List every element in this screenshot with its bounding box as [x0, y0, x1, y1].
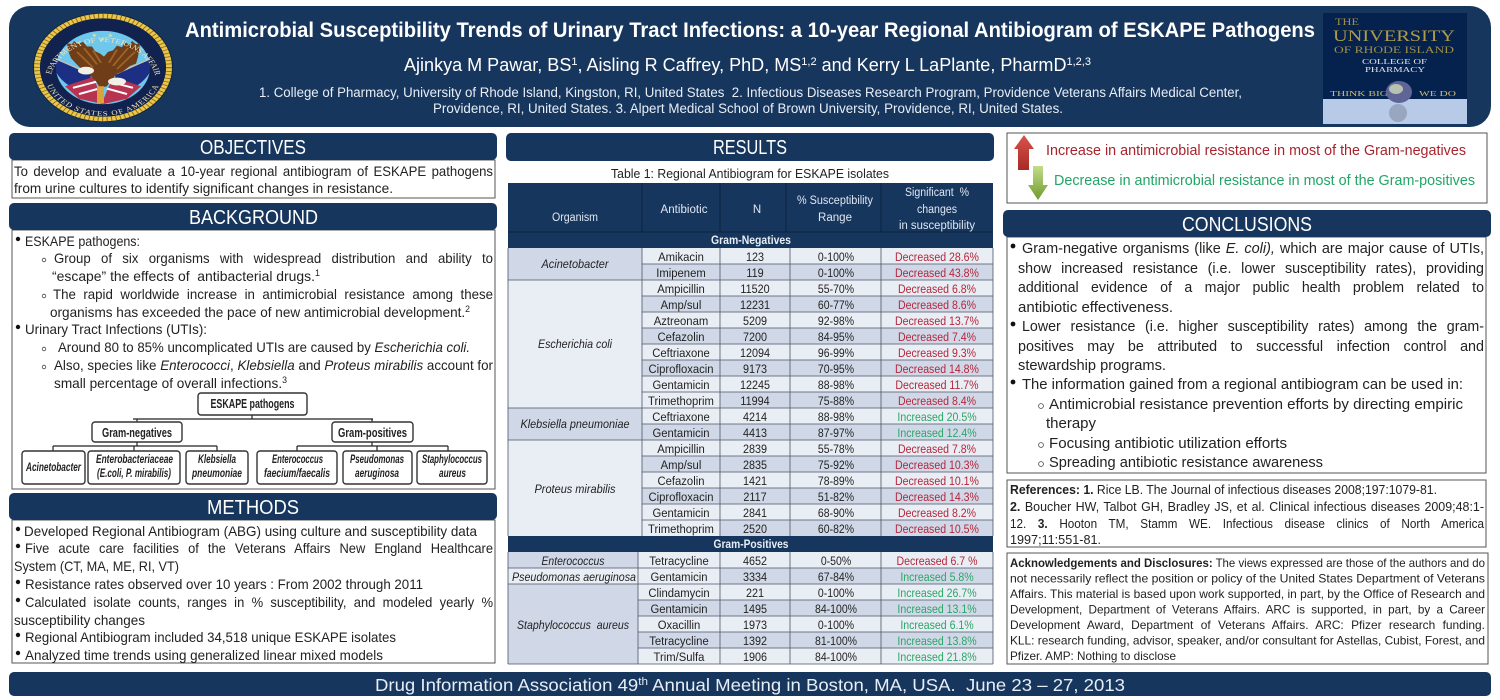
panel: acknowledgements and disclosures: Development Award, Department of Veterans Affairs. ARC: Pfizer research funding.: [1010, 618, 1485, 632]
antibiotic column: Amikacin: [658, 251, 704, 264]
methods text: System (CT, MA, ME, RI, VT): [14, 558, 179, 574]
logo: University of Rhode Island College of Pharmacy: UNIVERSITY: [1333, 28, 1455, 45]
conclusions text: show increased resistance (i.e. lower susceptibility rates), providing: [1018, 260, 1484, 277]
N column: 119: [746, 268, 764, 280]
ESKAPE pathogens tree diagram: Gram-positives: [338, 426, 407, 440]
organism names: Acinetobacter: [541, 257, 609, 271]
susceptibility range column: 0-100%: [818, 619, 854, 632]
significant changes column: Decreased 7.8%: [898, 443, 976, 456]
arrow: increase in resistance: [1014, 135, 1034, 170]
conclusions text: positives may be attributed to successful infection control and: [1018, 338, 1484, 355]
N column: 12094: [740, 348, 771, 360]
N column: 4214: [743, 412, 768, 424]
antibiotic column: Ciprofloxacin: [648, 491, 714, 504]
heading: objectives: OBJECTIVES: [200, 137, 306, 159]
significant changes column: Decreased 14.8%: [895, 363, 979, 376]
N column: 11520: [740, 284, 770, 296]
icon: Department of Veterans Affairs seal: [33, 13, 173, 122]
methods text: Regional Antibiogram included 34,518 unique ESKAPE isolates: [25, 629, 396, 645]
N column: 5209: [743, 316, 767, 328]
significant changes column: Increased 26.7%: [897, 587, 977, 600]
logo: University of Rhode Island College of Pharmacy: COLLEGE OF: [1362, 57, 1427, 66]
authors: and Kerry L LaPlante, PharmD: [817, 55, 1066, 75]
antibiotic column: Ceftriaxone: [652, 411, 710, 424]
authors: 1,2,3: [1066, 56, 1091, 68]
antibiotic column: Amp/sul: [661, 459, 701, 472]
significant changes column: Increased 5.8%: [900, 571, 974, 584]
conclusions text: Antimicrobial resistance prevention efforts by directing empiric: [1049, 396, 1463, 413]
N column: 4413: [743, 428, 767, 440]
panel: acknowledgements and disclosures: [1007, 553, 1488, 664]
logo: University of Rhode Island College of Pharmacy: WE DO: [1419, 89, 1457, 98]
susceptibility range column: 75-92%: [818, 459, 854, 472]
significant changes column: Decreased 7.4%: [898, 331, 976, 344]
ESKAPE pathogens tree diagram: Gram-negatives: [102, 426, 172, 440]
affiliations: [259, 85, 1242, 116]
significant changes column: Decreased 10.3%: [895, 459, 979, 472]
N column: 1421: [743, 476, 767, 488]
panel: acknowledgements and disclosures: Development, Department of Veterans Affairs. ARC is supported, in part, by a Career: [1010, 602, 1485, 616]
title: Antimicrobial Susceptibility Trends of Urinary Tract Infections: a 10-year Regional Antibiogram of ESKAPE Pathogens: [185, 18, 1315, 42]
panel: resistance trend callout: [1007, 133, 1487, 203]
heading: conclusions: CONCLUSIONS: [1182, 214, 1312, 236]
decrease text: Decrease in antimicrobial resistance in most of the Gram-positives: [1054, 173, 1475, 189]
background text: [16, 233, 493, 391]
susceptibility range column: 84-95%: [818, 331, 854, 344]
N column: 2520: [743, 524, 767, 536]
N column: 4652: [743, 556, 767, 568]
methods text: Five acute care facilities of the Veterans Affairs New England Healthcare: [25, 540, 493, 556]
organism names: [512, 257, 636, 632]
antibiotic column: Ceftriaxone: [652, 347, 710, 360]
ESKAPE pathogens tree diagram: aureus: [439, 468, 466, 480]
susceptibility range column: 81-100%: [815, 635, 857, 648]
footer banner: Drug Information Association 49: [375, 675, 623, 695]
table header row: [508, 183, 993, 248]
susceptibility range column: 96-99%: [818, 347, 854, 360]
susceptibility range column: 51-82%: [818, 491, 854, 504]
conclusions text: The information gained from a regional antibiogram can be used in:: [1022, 376, 1463, 393]
ESKAPE pathogens tree diagram: Enterococcus: [272, 454, 323, 466]
heading: background: BACKGROUND: [189, 207, 318, 229]
ESKAPE pathogens tree diagram: Staphylococcus: [422, 454, 482, 466]
footer banner: Annual Meeting in Boston, MA, USA. June 23 – 27, 2013: [648, 675, 1125, 695]
N column: 7200: [743, 332, 767, 344]
significant changes column: Decreased 43.8%: [895, 267, 979, 280]
panel: results: [506, 133, 994, 664]
significant changes column: Increased 21.8%: [897, 651, 977, 664]
ESKAPE pathogens tree diagram: [22, 393, 487, 484]
N column: 1906: [743, 652, 767, 664]
significant changes column: [895, 251, 979, 664]
significant changes column: Increased 20.5%: [897, 411, 977, 424]
table header row: Antibiotic: [660, 204, 708, 216]
ESKAPE pathogens tree diagram: Pseudomonas: [350, 454, 404, 466]
susceptibility range column: 70-95%: [818, 363, 854, 376]
antibiotic column: Cefazolin: [658, 331, 704, 344]
N column: 1392: [743, 636, 767, 648]
background text: small percentage of overall infections.: [54, 375, 288, 391]
table header row: in susceptibility: [899, 220, 975, 232]
conclusions text: [1011, 240, 1484, 471]
significant changes column: Decreased 10.1%: [895, 475, 979, 488]
icon: Department of Veterans Affairs seal: DEPARTMENT OF VETERANS AFFAIRS: [46, 37, 160, 76]
significant changes column: Decreased 8.2%: [898, 507, 976, 520]
conclusions text: antibiotic effectiveness.: [1018, 299, 1173, 316]
significant changes column: Decreased 9.3%: [898, 347, 976, 360]
antibiotic column: Ampicillin: [657, 283, 705, 296]
conclusions text: therapy: [1046, 415, 1096, 432]
susceptibility range column: 0-100%: [818, 587, 854, 600]
ESKAPE pathogens tree diagram: Klebsiella: [198, 454, 236, 466]
susceptibility range column: 68-90%: [818, 507, 854, 520]
antibiotic column: Gentamicin: [653, 427, 709, 440]
table header row: changes: [917, 204, 957, 216]
methods text: [14, 523, 493, 663]
antibiotic column: Clindamycin: [648, 587, 710, 600]
organism names: Enterococcus: [542, 554, 604, 568]
logo: University of Rhode Island College of Pharmacy: OF RHODE ISLAND: [1334, 46, 1454, 56]
organism names: Pseudomonas aeruginosa: [512, 570, 636, 584]
objectives text: from urine cultures to identify significant changes in resistance.: [14, 180, 393, 196]
N column: 2841: [743, 508, 767, 520]
significant changes column: Decreased 11.7%: [895, 379, 979, 392]
ESKAPE pathogens tree diagram: (E.coli, P. mirabilis): [97, 468, 171, 480]
background text: 3: [282, 375, 287, 385]
significant changes column: Decreased 8.6%: [898, 299, 976, 312]
N column: 12231: [740, 300, 770, 312]
background text: The rapid worldwide increase in antimicrobial resistance among these: [53, 286, 493, 302]
susceptibility range column: 67-84%: [818, 571, 854, 584]
methods text: Calculated isolate counts, ranges in % susceptibility, and modeled yearly %: [25, 594, 493, 610]
panel: references: 1997;11:551-81.: [1010, 533, 1101, 547]
susceptibility range column: 0-50%: [821, 555, 851, 568]
N column: 1973: [743, 620, 767, 632]
organism names: Staphylococcus aureus: [517, 618, 629, 632]
conclusions text: Focusing antibiotic utilization efforts: [1049, 435, 1287, 452]
ESKAPE pathogens tree diagram: Enterobacteriaceae: [96, 454, 173, 466]
heading: results: RESULTS: [713, 137, 787, 159]
significant changes column: Decreased 6.7 %: [897, 555, 977, 568]
susceptibility range column: 84-100%: [815, 651, 857, 664]
significant changes column: Decreased 13.7%: [895, 315, 979, 328]
panel: references: References: 1. Rice LB. The Journal of infectious diseases 2008;197:1079-81.: [1010, 483, 1437, 497]
panel: objectives: [9, 133, 497, 198]
susceptibility range column: 0-100%: [818, 267, 854, 280]
antibiotic column: Tetracycline: [649, 635, 709, 648]
susceptibility range column: 55-78%: [818, 443, 854, 456]
table header row: Significant %: [905, 187, 969, 199]
antibiotic column: Cefazolin: [658, 475, 704, 488]
significant changes column: Decreased 10.5%: [895, 523, 979, 536]
antibiotic column: Trimethoprim: [648, 523, 714, 536]
susceptibility range column: 84-100%: [815, 603, 857, 616]
authors: 1: [571, 56, 577, 68]
significant changes column: Decreased 8.4%: [898, 395, 976, 408]
logo: University of Rhode Island College of Pharmacy: PHARMACY: [1365, 65, 1426, 74]
authors: 1,2: [801, 56, 817, 68]
antibiotic column: Imipenem: [656, 267, 706, 280]
antibiotic column: Aztreonam: [654, 315, 708, 328]
antibiotic column: Gentamicin: [653, 507, 709, 520]
ESKAPE pathogens tree diagram: Acinetobacter: [25, 462, 81, 474]
conclusions text: additional evidence of a major public health problem related to: [1018, 279, 1484, 296]
organism names: Klebsiella pneumoniae: [520, 417, 630, 431]
panel: acknowledgements and disclosures: KLL: research funding, advisor, speaker, and/or consultant for Astellas, Cubist, Forest, and: [1010, 634, 1485, 648]
background text: “escape” the effects of antibacterial drugs.: [52, 268, 316, 284]
antibiotic column: Tetracycline: [649, 555, 709, 568]
background text: ESKAPE pathogens:: [25, 233, 140, 249]
ESKAPE pathogens tree diagram: pneumoniae: [191, 468, 242, 480]
ESKAPE pathogens tree diagram: ESKAPE pathogens: [210, 397, 295, 411]
susceptibility range column: 75-88%: [818, 395, 854, 408]
susceptibility range column: [815, 251, 857, 664]
background text: organisms has exceeded the pace of new antimicrobial development.: [50, 304, 479, 320]
N column: [740, 252, 771, 664]
N column: 9173: [743, 364, 767, 376]
antibiotic column: Gentamicin: [651, 571, 707, 584]
logo: University of Rhode Island College of Pharmacy: THINK BIG: [1330, 89, 1389, 98]
antibiotic column: Ampicillin: [657, 443, 705, 456]
susceptibility range column: 88-98%: [818, 379, 854, 392]
significant changes column: Decreased 28.6%: [895, 251, 979, 264]
antibiotic column: Trimethoprim: [648, 395, 714, 408]
objectives text: To develop and evaluate a 10-year regional antibiogram of ESKAPE pathogens: [14, 163, 493, 179]
Gram-positives label: Gram-Positives: [714, 539, 788, 551]
panel: methods: [9, 493, 497, 663]
arrow: decrease in resistance: [1028, 166, 1048, 200]
affiliations: 1. College of Pharmacy, University of Rhode Island, Kingston, RI, United States 2. Infectious Diseases Research Program, Providence Veterans Affairs Medical Center,: [259, 85, 1242, 100]
methods text: susceptibility changes: [14, 612, 145, 628]
N column: 2835: [743, 460, 767, 472]
ESKAPE pathogens tree diagram: faecium/faecalis: [264, 468, 330, 480]
panel: references: [1007, 480, 1486, 547]
background text: 1: [315, 268, 320, 278]
objectives text: [14, 163, 493, 196]
table header row: N: [753, 204, 761, 216]
methods text: Developed Regional Antibiogram (ABG) using culture and susceptibility data: [24, 523, 477, 539]
panel: references: 2. Boucher HW, Talbot GH, Bradley JS, et al. Clinical infectious diseases 2009;48:1-: [1010, 500, 1484, 514]
table header row: % Susceptibility: [797, 195, 873, 207]
panel: acknowledgements and disclosures: Acknowledgements and Disclosures: The views expressed are those of the authors and do: [1010, 556, 1485, 570]
background text: Also, species like Enterococci, Klebsiella and Proteus mirabilis account for: [54, 357, 493, 373]
methods text: Analyzed time trends using generalized linear mixed models: [25, 647, 383, 663]
panel: conclusions: [1003, 210, 1491, 473]
table header row: Gram-Negatives: [711, 235, 791, 247]
authors: , Aisling R Caffrey, PhD, MS: [577, 55, 801, 75]
significant changes column: Decreased 6.8%: [898, 283, 976, 296]
susceptibility range column: 0-100%: [818, 251, 854, 264]
footer banner: [9, 672, 1491, 696]
ESKAPE pathogens tree diagram: aeruginosa: [355, 468, 399, 480]
background text: Urinary Tract Infections (UTIs):: [25, 321, 207, 337]
N column: 221: [746, 588, 764, 600]
affiliations: Providence, RI, United States. 3. Alpert Medical School of Brown University, Providence, RI, United States.: [433, 101, 1063, 116]
antibiotic column: Gentamicin: [651, 603, 707, 616]
susceptibility range column: 88-98%: [818, 411, 854, 424]
conclusions text: Spreading antibiotic resistance awareness: [1049, 454, 1323, 471]
N column: 11994: [740, 396, 770, 408]
footer banner: th: [638, 676, 648, 688]
conclusions text: Lower resistance (i.e. higher susceptibility rates) among the gram-: [1022, 318, 1484, 335]
heading: methods: METHODS: [207, 497, 299, 519]
background text: 2: [465, 304, 470, 314]
icon: Department of Veterans Affairs seal: UNITED STATES OF AMERICA: [48, 84, 159, 116]
antibiotic column: Oxacillin: [658, 619, 700, 632]
significant changes column: Increased 13.1%: [897, 603, 977, 616]
logo: University of Rhode Island College of Pharmacy: [1323, 13, 1467, 124]
susceptibility range column: 55-70%: [818, 283, 854, 296]
N column: 123: [746, 252, 764, 264]
antibiotic column: [648, 251, 714, 664]
susceptibility range column: 92-98%: [818, 315, 854, 328]
significant changes column: Increased 13.8%: [897, 635, 977, 648]
authors: Ajinkya M Pawar, BS: [404, 55, 571, 75]
Gram-positives divider band: [508, 536, 993, 552]
organism names: Proteus mirabilis: [534, 482, 616, 496]
table caption: Table 1: Regional Antibiogram for ESKAPE isolates: [611, 166, 889, 181]
conclusions text: stewardship programs.: [1018, 357, 1166, 374]
N column: 3334: [743, 572, 768, 584]
panel: acknowledgements and disclosures: not necessarily reflect the position or policy of the United States Department of Veterans: [1010, 572, 1485, 586]
significant changes column: Decreased 14.3%: [895, 491, 979, 504]
table header row: Range: [818, 212, 852, 224]
panel: acknowledgements and disclosures: Affairs. This material is based upon work supported, in part, by the Office of Research and: [1010, 587, 1485, 601]
antibiotic column: Amp/sul: [661, 299, 701, 312]
table header row: Organism: [552, 212, 598, 224]
significant changes column: Increased 6.1%: [900, 619, 974, 632]
increase text: Increase in antimicrobial resistance in most of the Gram-negatives: [1046, 143, 1466, 159]
susceptibility range column: 87-97%: [818, 427, 854, 440]
antibiotic column: Gentamicin: [653, 379, 709, 392]
table: regional antibiogram: [508, 183, 993, 664]
antibiotic column: Ciprofloxacin: [648, 363, 714, 376]
antibiotic column: Trim/Sulfa: [654, 651, 705, 664]
N column: 2117: [743, 492, 767, 504]
header banner: [9, 6, 1491, 127]
panel: background: [9, 203, 497, 489]
panel: acknowledgements and disclosures: Pfizer. AMP: Nothing to disclose: [1010, 649, 1176, 663]
susceptibility range column: 78-89%: [818, 475, 854, 488]
significant changes column: Increased 12.4%: [897, 427, 977, 440]
N column: 1495: [743, 604, 767, 616]
logo: University of Rhode Island College of Pharmacy: THE: [1335, 17, 1360, 27]
background text: Group of six organisms with widespread distribution and ability to: [54, 250, 493, 266]
susceptibility range column: 60-77%: [818, 299, 854, 312]
conclusions text: Gram-negative organisms (like E. coli), which are major cause of UTIs,: [1022, 240, 1484, 257]
table body shading: [508, 248, 993, 664]
susceptibility range column: 60-82%: [818, 523, 854, 536]
N column: 2839: [743, 444, 767, 456]
N column: 12245: [740, 380, 770, 392]
methods text: Resistance rates observed over 10 years : From 2002 through 2011: [25, 576, 423, 592]
organism names: Escherichia coli: [538, 337, 612, 351]
background text: Around 80 to 85% uncomplicated UTIs are caused by Escherichia coli.: [58, 339, 470, 355]
